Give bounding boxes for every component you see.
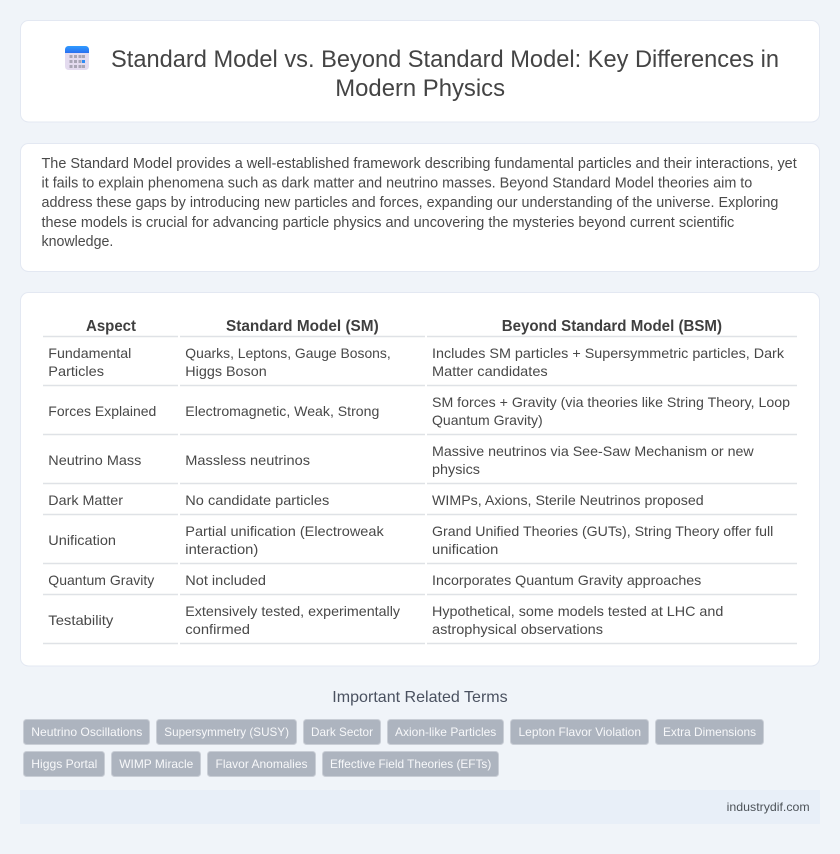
footer source text: industrydif.com xyxy=(727,800,810,814)
table row: testability: Extensively tested, experimentally xyxy=(185,603,400,619)
table row: quantum gravity: Quantum Gravity xyxy=(48,572,154,588)
tag: axion-like particles: Axion-like Particles xyxy=(395,725,496,739)
panel: introduction xyxy=(20,144,820,272)
table row: dark matter xyxy=(48,492,704,508)
table row: dark matter: WIMPs, Axions, Sterile Neutrinos proposed xyxy=(432,492,704,508)
text block: introduction paragraph: address these gaps by introducing new particles and forces, expanding our understanding of the universe. Exploring xyxy=(42,195,778,211)
title xyxy=(111,46,779,102)
table row: neutrino mass xyxy=(48,443,755,477)
tag: dark sector xyxy=(304,720,380,744)
table row: forces explained xyxy=(48,394,790,428)
table row: forces explained: Forces Explained xyxy=(48,403,156,419)
heading: important related terms: Important Related Terms xyxy=(332,689,508,706)
table row: unification: Unification xyxy=(48,532,116,548)
table row: testability: confirmed xyxy=(185,621,250,637)
table header row xyxy=(86,318,722,335)
tag: lepton flavor violation xyxy=(510,720,648,744)
tag: extra dimensions: Extra Dimensions xyxy=(663,725,756,739)
panel: related term tags xyxy=(24,720,764,776)
panel: comparison table xyxy=(20,292,820,666)
tag: lepton flavor violation: Lepton Flavor Violation xyxy=(518,725,641,739)
table row: forces explained: Quantum Gravity) xyxy=(432,412,543,428)
table header row: Beyond Standard Model (BSM) xyxy=(502,318,722,335)
tag: wimp miracle: WIMP Miracle xyxy=(119,757,194,771)
tag: axion-like particles xyxy=(388,720,504,744)
tag: effective field theories: Effective Field Theories (EFTs) xyxy=(330,757,491,771)
table row: dark matter: No candidate particles xyxy=(185,492,329,508)
table row: fundamental particles: Matter candidates xyxy=(432,363,548,379)
table row: unification: Partial unification (Electroweak xyxy=(185,523,385,539)
table row: quantum gravity: Incorporates Quantum Gravity approaches xyxy=(432,572,701,588)
table row: fundamental particles: Fundamental xyxy=(48,345,131,361)
tag: higgs portal xyxy=(24,752,104,776)
title: Standard Model vs. Beyond Standard Model: Key Differences in xyxy=(111,46,779,73)
tag: higgs portal: Higgs Portal xyxy=(31,757,97,771)
text block: introduction paragraph xyxy=(42,156,797,250)
table row: unification: Grand Unified Theories (GUTs), String Theory offer full xyxy=(432,523,773,539)
table row: quantum gravity: Not included xyxy=(185,572,266,588)
table row: forces explained: SM forces + Gravity (via theories like String Theory, Loop xyxy=(432,394,790,410)
table row: neutrino mass: physics xyxy=(432,461,480,477)
tag: neutrino oscillations xyxy=(24,720,150,744)
table row: forces explained: Electromagnetic, Weak, Strong xyxy=(185,403,379,419)
table row: fundamental particles: Includes SM particles + Supersymmetric particles, Dark xyxy=(432,345,785,361)
table row: testability xyxy=(48,603,723,637)
table row: unification: unification xyxy=(432,541,498,557)
tag: neutrino oscillations: Neutrino Oscillations xyxy=(31,725,142,739)
tag: dark sector: Dark Sector xyxy=(311,725,373,739)
icon: calendar xyxy=(65,46,89,70)
tag: supersymmetry: Supersymmetry (SUSY) xyxy=(164,725,289,739)
table row: testability: astrophysical observations xyxy=(432,621,603,637)
text block: introduction paragraph: it fails to explain phenomena such as dark matter and neutrino masses. Beyond Standard Model theories aim to xyxy=(42,176,752,192)
table row: dark matter: Dark Matter xyxy=(48,492,123,508)
tag: wimp miracle xyxy=(112,752,200,776)
table row: neutrino mass: Massless neutrinos xyxy=(185,452,310,468)
footer bar xyxy=(20,790,820,824)
tag: flavor anomalies: Flavor Anomalies xyxy=(216,757,308,771)
tag: supersymmetry xyxy=(156,720,296,744)
text block: introduction paragraph: knowledge. xyxy=(42,234,113,250)
title: Modern Physics xyxy=(335,75,505,102)
table header row: Standard Model (SM) xyxy=(226,318,379,335)
tag: extra dimensions xyxy=(656,720,764,744)
table row: quantum gravity xyxy=(48,572,701,588)
table row: unification: interaction) xyxy=(185,541,258,557)
text block: introduction paragraph: these models is crucial for advancing particle physics and uncovering the mysteries beyond current scientific xyxy=(42,215,734,231)
table row: testability: Hypothetical, some models tested at LHC and xyxy=(432,603,723,619)
tag: flavor anomalies xyxy=(208,752,316,776)
panel: title header xyxy=(20,20,820,122)
table row: unification xyxy=(48,523,773,557)
table row: fundamental particles: Quarks, Leptons, Gauge Bosons, xyxy=(185,345,391,361)
table row: fundamental particles: Higgs Boson xyxy=(185,363,267,379)
table row: testability: Testability xyxy=(48,612,113,628)
table row: neutrino mass: Massive neutrinos via See-Saw Mechanism or new xyxy=(432,443,755,459)
table header row: Aspect xyxy=(86,318,137,335)
table row: neutrino mass: Neutrino Mass xyxy=(48,452,141,468)
table row: fundamental particles xyxy=(48,345,785,379)
text block: introduction paragraph: The Standard Model provides a well-established framework describing fundamental particles and their interactions, yet xyxy=(42,156,797,172)
tag: effective field theories xyxy=(322,752,498,776)
table row: fundamental particles: Particles xyxy=(48,363,104,379)
